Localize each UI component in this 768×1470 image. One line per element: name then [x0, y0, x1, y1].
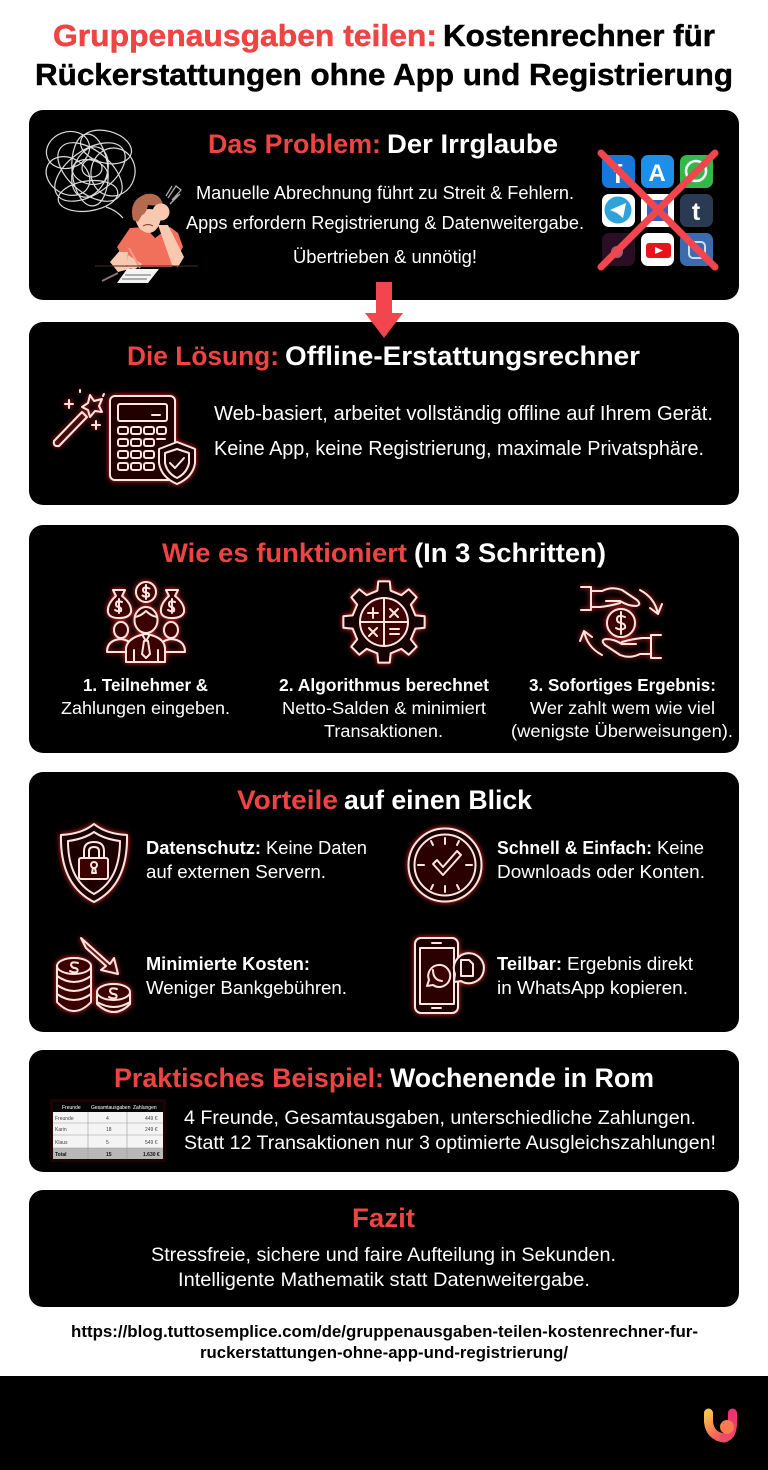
text: step 3	[511, 675, 733, 741]
text: fast and simple: Schnell & Einfach:	[497, 837, 652, 858]
heading: conclusion: Fazit	[352, 1203, 415, 1233]
text: shareable: Ergebnis direkt	[567, 953, 693, 974]
text: conclusion: Stressfreie, sichere und faire Aufteilung in Sekunden.	[151, 1245, 616, 1266]
heading: benefits	[237, 785, 533, 815]
table thumbnail: 549 €	[145, 1140, 158, 1146]
title: Kostenrechner für	[443, 18, 715, 53]
text: step 2	[279, 675, 489, 741]
benefit: minimized costs	[57, 938, 347, 1012]
text: privacy: Datenschutz:	[146, 837, 261, 858]
text: example description	[184, 1108, 716, 1154]
text: minimized costs: Weniger Bankgebühren.	[146, 977, 347, 998]
heading: example	[114, 1063, 654, 1093]
text: problem description: Manuelle Abrechnung führt zu Streit & Fehlern.	[196, 182, 574, 203]
text: step 2: 2. Algorithmus berechnet	[279, 675, 489, 695]
text: minimized costs	[146, 953, 347, 998]
icon: hands exchanging money	[580, 587, 662, 658]
table thumbnail: 449 €	[145, 1116, 158, 1122]
text: privacy: Keine Daten	[266, 837, 367, 858]
heading: solution: Die Lösung:	[127, 341, 279, 371]
text: fast and simple	[497, 837, 705, 882]
text: problem description: Apps erfordern Registrierung & Datenweitergabe.	[186, 212, 584, 233]
text: privacy: auf externen Servern.	[146, 861, 326, 882]
table thumbnail: 5	[106, 1140, 109, 1146]
text: step 3: Wer zahlt wem wie viel	[530, 698, 715, 718]
icon: shield with lock	[61, 824, 127, 902]
heading: problem	[208, 129, 558, 159]
table thumbnail: Karin	[55, 1127, 67, 1133]
table thumbnail: 18	[106, 1127, 112, 1133]
icon: stressed person	[95, 186, 198, 283]
heading: solution: Offline-Erstattungsrechner	[285, 341, 640, 371]
text: step 2: Transaktionen.	[324, 721, 443, 741]
text: step 1: 1. Teilnehmer &	[83, 675, 208, 695]
table thumbnail: 249 €	[145, 1127, 158, 1133]
source url	[71, 1323, 698, 1362]
heading: benefits: auf einen Blick	[344, 785, 533, 815]
icon: crossed out apps: t	[692, 198, 701, 226]
icon: crossed out apps: A	[648, 160, 666, 187]
text: step 3: (wenigste Überweisungen).	[511, 721, 733, 741]
logo	[708, 1413, 734, 1438]
icon: crossed out apps	[601, 153, 715, 267]
heading: how it works: Wie es funktioniert	[162, 538, 407, 568]
text: fast and simple: Keine	[657, 837, 704, 858]
text: shareable: Teilbar:	[497, 953, 562, 974]
table thumbnail: 15	[106, 1152, 112, 1158]
heading: solution	[127, 341, 640, 371]
heading: example: Praktisches Beispiel:	[114, 1063, 384, 1093]
table thumbnail: Zahlungen	[133, 1105, 157, 1111]
text: privacy	[146, 837, 367, 882]
icon: crossed out apps: f	[614, 159, 623, 189]
panel: how it works	[29, 525, 739, 753]
table thumbnail: Total	[55, 1152, 67, 1158]
table thumbnail: Gesamtausgaben	[91, 1105, 131, 1111]
step 2	[279, 581, 489, 741]
table thumbnail: Klaus	[55, 1140, 68, 1146]
text: example description: Statt 12 Transaktionen nur 3 optimierte Ausgleichszahlungen!	[184, 1133, 716, 1154]
icon: people and money bags	[107, 582, 185, 662]
icon: magic wand	[54, 390, 104, 446]
step 1	[61, 582, 230, 718]
heading: how it works: (In 3 Schritten)	[414, 538, 606, 568]
source url: https://blog.tuttosemplice.com/de/gruppenausgaben-teilen-kostenrechner-fur-	[71, 1323, 698, 1341]
text: conclusion: Intelligente Mathematik statt Datenweitergabe.	[178, 1270, 590, 1291]
table thumbnail: Freunde	[55, 1116, 74, 1122]
text: fast and simple: Downloads oder Konten.	[497, 861, 705, 882]
benefit: privacy	[61, 824, 367, 902]
table thumbnail: Freunde	[62, 1105, 81, 1111]
text: shareable	[497, 953, 693, 998]
text: solution description: Web-basiert, arbeitet vollständig offline auf Ihrem Gerät.	[214, 403, 713, 425]
panel: conclusion	[29, 1190, 739, 1307]
arrow: problem to solution	[365, 282, 403, 338]
text: problem description: Übertrieben & unnötig!	[293, 246, 477, 267]
footer band	[0, 1376, 768, 1470]
icon: clock with check	[408, 828, 482, 902]
heading: benefits: Vorteile	[237, 785, 338, 815]
text: minimized costs: Minimierte Kosten:	[146, 953, 310, 974]
panel: example	[29, 1050, 739, 1172]
icon: coins with down arrow	[57, 938, 130, 1012]
title: Rückerstattungen ohne App und Registrierung	[35, 57, 733, 92]
table thumbnail	[50, 1099, 166, 1162]
title	[35, 18, 733, 92]
text: step 2: Netto-Salden & minimiert	[282, 698, 486, 718]
benefit: fast and simple	[408, 828, 705, 902]
panel: benefits	[29, 772, 739, 1032]
title: Gruppenausgaben teilen:	[53, 18, 437, 53]
step 3	[511, 587, 733, 741]
benefit: shareable	[415, 938, 693, 1013]
text: step 1	[61, 675, 230, 718]
heading: problem: Das Problem:	[208, 129, 381, 159]
heading: how it works	[162, 538, 606, 568]
text: solution description: Keine App, keine Registrierung, maximale Privatsphäre.	[214, 438, 704, 460]
heading: example: Wochenende in Rom	[390, 1063, 654, 1093]
text: conclusion	[151, 1245, 616, 1291]
text: solution description	[214, 403, 713, 460]
text: step 1: Zahlungen eingeben.	[61, 698, 230, 718]
source url: ruckerstattungen-ohne-app-und-registrierung/	[200, 1344, 568, 1362]
icon: gear with math symbols	[343, 581, 425, 663]
text: shareable: in WhatsApp kopieren.	[497, 977, 688, 998]
icon: phone with chat bubbles	[415, 938, 484, 1013]
table thumbnail: 1.630 €	[143, 1152, 160, 1158]
icon: calculator with shield	[110, 396, 195, 484]
text: step 3: 3. Sofortiges Ergebnis:	[529, 675, 716, 695]
icon: tangled scribble	[39, 125, 139, 218]
text: example description: 4 Freunde, Gesamtausgaben, unterschiedliche Zahlungen.	[184, 1108, 696, 1129]
text: problem description	[186, 182, 584, 267]
table thumbnail: 4	[106, 1116, 109, 1122]
heading: problem: Der Irrglaube	[387, 129, 558, 159]
panel: problem	[29, 110, 739, 300]
